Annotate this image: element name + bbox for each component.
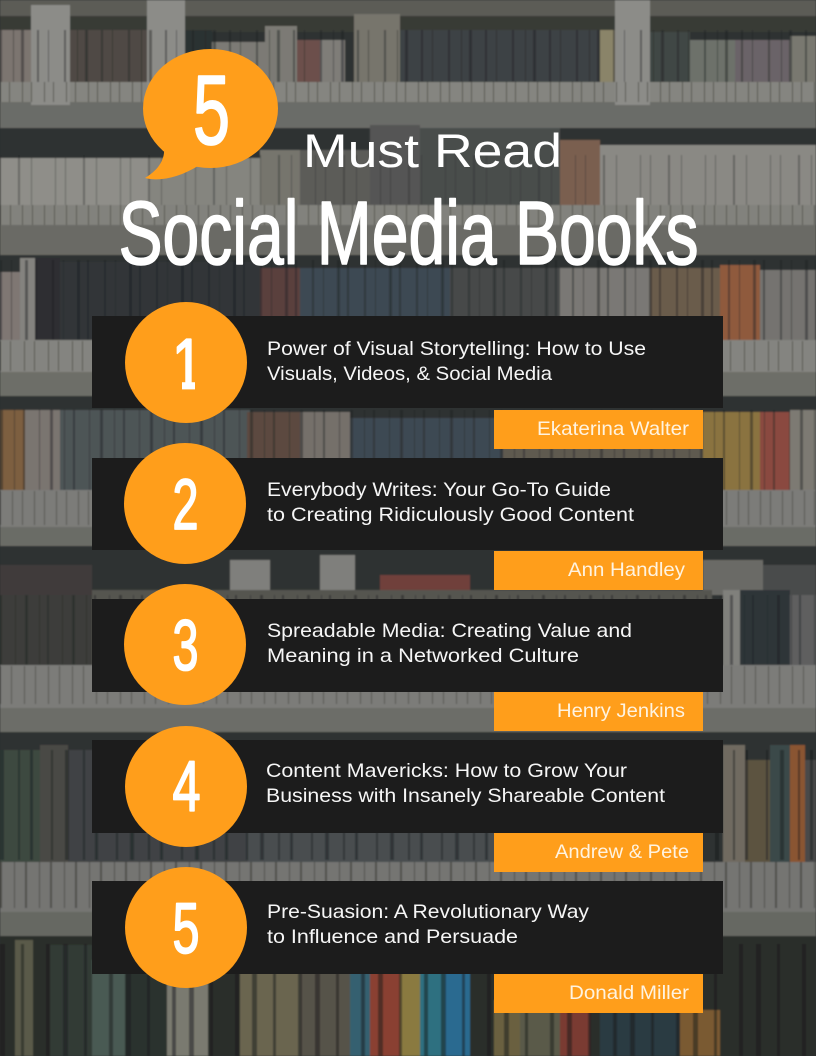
panel: book 1: 1 <box>172 326 203 404</box>
panel: book 1: Visuals, Videos, & Social Media <box>267 363 552 385</box>
panel: book 5: 5 <box>172 890 200 969</box>
panel: book 3: Henry Jenkins <box>557 700 685 722</box>
title: Must Read: Must Read <box>303 124 562 177</box>
panel: book 4: 4 <box>172 748 200 826</box>
panel: book 4: Business with Insanely Shareable Content <box>266 785 666 807</box>
panel: book 5: to Influence and Persuade <box>267 926 518 948</box>
panel: book 2: Ann Handley <box>568 559 685 581</box>
panel: book 1 <box>92 302 723 449</box>
panel: book 1: Ekaterina Walter <box>537 418 690 440</box>
panel: book 2: Everybody Writes: Your Go-To Guide <box>267 479 611 501</box>
panel: book 3: Meaning in a Networked Culture <box>267 645 579 667</box>
panel: book 1: Power of Visual Storytelling: How to Use <box>267 338 646 360</box>
panel: book 2: 2 <box>172 466 198 545</box>
panel: book 2: to Creating Ridiculously Good Content <box>267 504 635 526</box>
icon: orange speech bubble with number 5 <box>143 49 278 179</box>
panel: book 5 <box>92 867 723 1013</box>
icon: orange speech bubble with number 5: 5 <box>193 55 230 165</box>
panel: book 3: 3 <box>172 607 198 686</box>
panel: book 5: Donald Miller <box>569 982 690 1004</box>
panel: book 4: Content Mavericks: How to Grow Your <box>266 760 628 782</box>
panel: book 3: Spreadable Media: Creating Value and <box>267 620 632 642</box>
panel: book 3 <box>92 584 723 731</box>
panel: book 4 <box>92 726 723 872</box>
panel: book 2 <box>92 443 723 590</box>
panel: book 4: Andrew & Pete <box>555 841 689 863</box>
panel: book 5: Pre-Suasion: A Revolutionary Way <box>267 901 589 923</box>
